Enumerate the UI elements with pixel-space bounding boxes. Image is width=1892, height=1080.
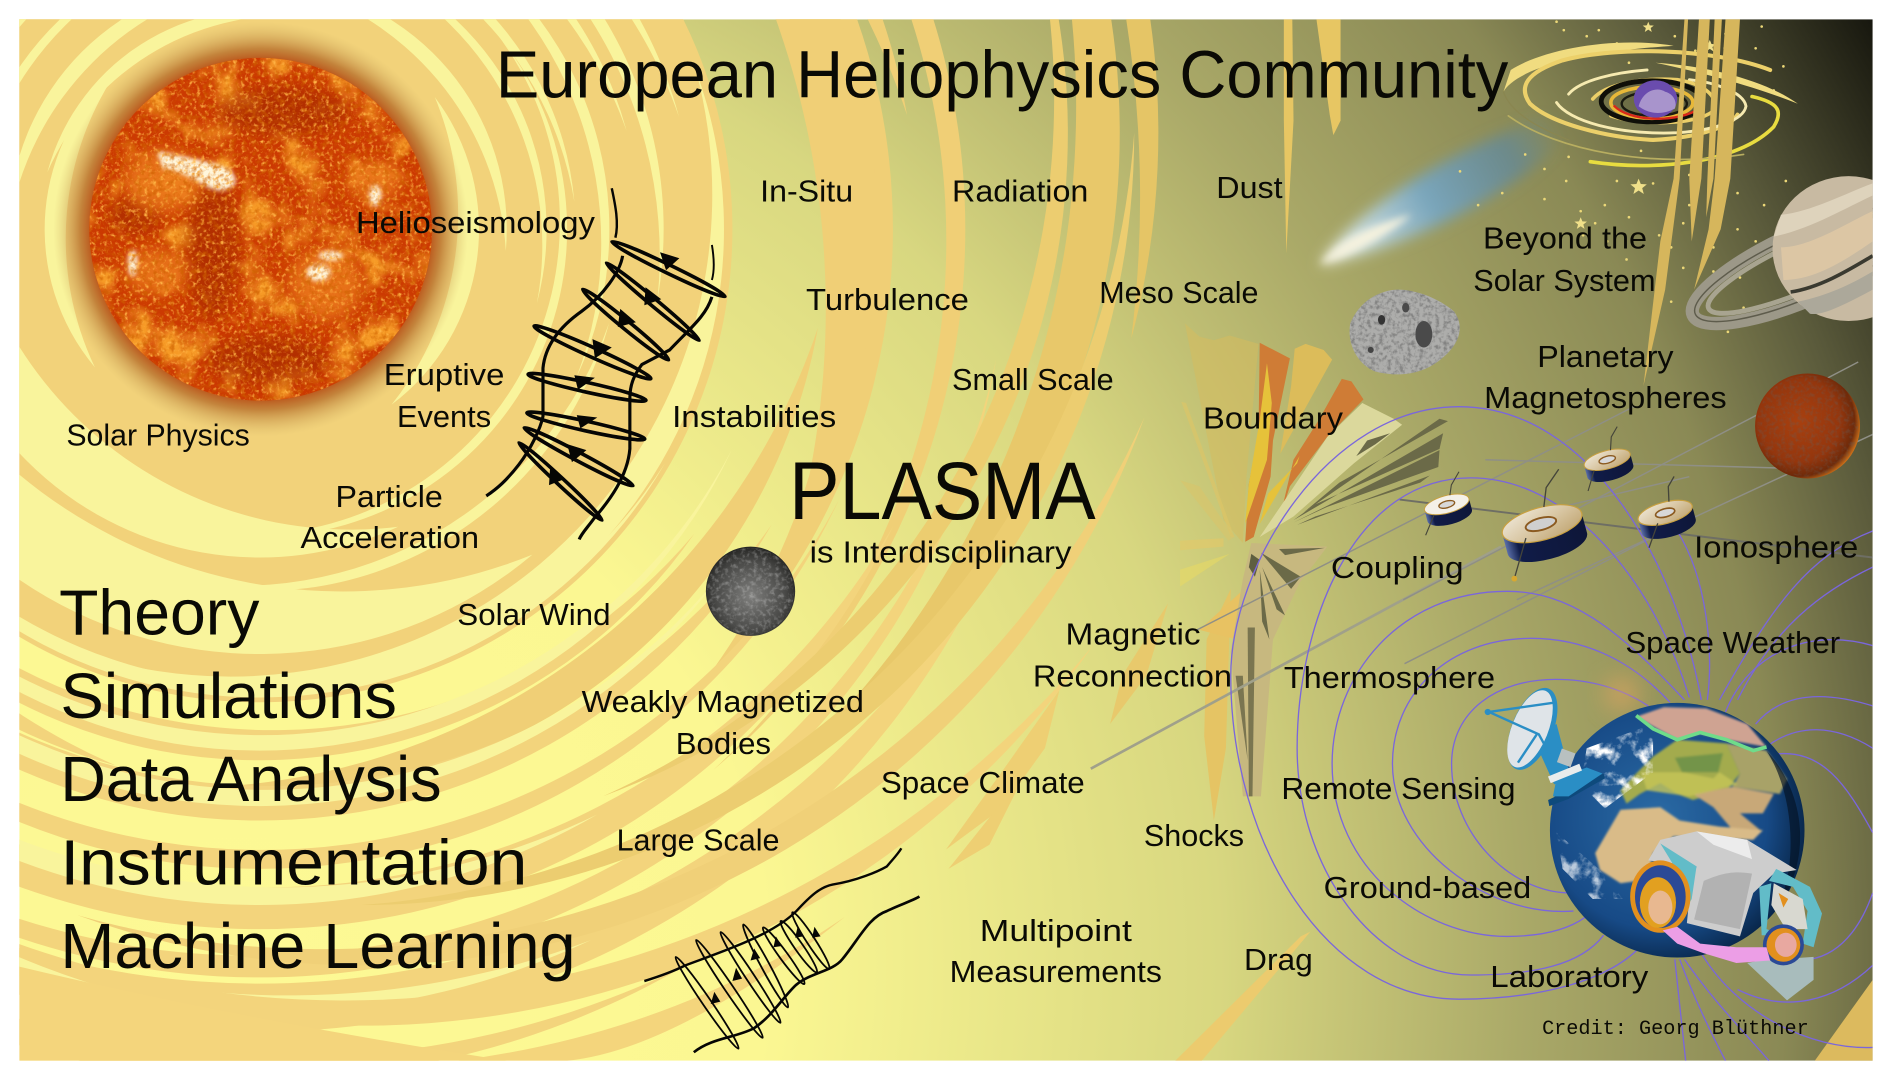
icon: Saturn — [1679, 176, 1892, 346]
label: Planetary Magnetospheres: Planetary — [1537, 339, 1674, 374]
label: Eruptive Events — [384, 357, 504, 434]
label: Solar Wind: Solar Wind — [457, 597, 611, 632]
label: Ionosphere: Ionosphere — [1694, 529, 1858, 564]
list: methods: Machine Learning — [60, 910, 576, 982]
label: Particle Acceleration: Acceleration — [300, 520, 479, 555]
purple magnetic field lines — [1231, 407, 1873, 1061]
label: Dust: Dust — [1216, 170, 1283, 205]
list: methods: Simulations — [60, 660, 397, 732]
label: Remote Sensing: Remote Sensing — [1281, 771, 1516, 806]
list: methods: Data Analysis — [60, 743, 442, 815]
swirling solar wind arcs — [19, 19, 996, 1061]
label: Magnetic Reconnection: Reconnection — [1033, 659, 1232, 694]
icon: sun halo — [53, 22, 468, 437]
label: Solar Physics: Solar Physics — [66, 417, 250, 452]
label: Boundary: Boundary — [1203, 400, 1344, 435]
bottom-left orange corner — [19, 967, 507, 1061]
gray field lines — [1091, 362, 1873, 769]
label: Radiation: Radiation — [952, 174, 1088, 209]
label: Magnetic Reconnection: Magnetic — [1065, 616, 1201, 651]
label: Large Scale: Large Scale — [617, 823, 779, 858]
label: Laboratory: Laboratory — [1490, 959, 1649, 994]
icon: Mars — [1755, 373, 1860, 478]
label: Helioseismology: Helioseismology — [356, 205, 596, 240]
label: Weakly Magnetized Bodies — [582, 684, 864, 761]
icon: sun — [89, 58, 432, 401]
label: Coupling: Coupling — [1331, 550, 1464, 585]
label: Drag: Drag — [1244, 942, 1313, 977]
heading: PLASMA: PLASMA — [789, 446, 1096, 537]
label: Thermosphere: Thermosphere — [1284, 660, 1495, 695]
label: Small Scale: Small Scale — [952, 362, 1114, 397]
icon: radio dish — [1485, 681, 1605, 806]
label: Beyond the Solar System: Solar System — [1473, 263, 1656, 298]
icon: spiral galaxy — [1503, 42, 1798, 166]
lower flux rope — [644, 848, 919, 1052]
label: Meso Scale: Meso Scale — [1099, 275, 1259, 310]
outer orange bands — [19, 19, 1158, 1026]
label: Eruptive Events: Events — [397, 399, 491, 434]
label: Shocks: Shocks — [1144, 818, 1244, 853]
label: Space Weather: Space Weather — [1625, 625, 1840, 660]
icon: asteroid — [1350, 290, 1460, 374]
title: European Heliophysics Community — [496, 39, 1509, 113]
label: Multipoint Measurements: Multipoint — [980, 913, 1132, 948]
subheading: is Interdisciplinary — [810, 534, 1072, 569]
label: Particle Acceleration: Particle — [335, 479, 443, 514]
icon: tokamak laboratory device — [1630, 831, 1822, 1000]
credit: Credit: Georg Blüthner — [1542, 1018, 1809, 1041]
label: Turbulence: Turbulence — [806, 282, 969, 317]
upper flux rope — [486, 188, 727, 539]
label: Multipoint Measurements — [950, 913, 1162, 989]
icon: stars — [1460, 22, 1786, 332]
label: Weakly Magnetized Bodies: Bodies — [676, 726, 771, 761]
label: In-Situ: In-Situ — [760, 174, 853, 209]
label: Planetary Magnetospheres — [1484, 339, 1727, 415]
label: Planetary Magnetospheres: Magnetospheres — [1484, 380, 1727, 415]
fan boundary structure — [1180, 323, 1448, 796]
list: methods: Instrumentation — [60, 827, 527, 899]
list: methods — [59, 577, 576, 982]
icon: Mercury — [706, 547, 795, 636]
label: Instabilities: Instabilities — [672, 399, 836, 434]
icon: satellites — [1412, 425, 1700, 582]
label: Ground-based: Ground-based — [1324, 870, 1531, 905]
icon: large stars — [1574, 22, 1735, 229]
tapered streaks — [946, 19, 1873, 1061]
tan vertical streaks over galaxy — [1643, 19, 1740, 386]
yellow streaks — [19, 19, 730, 1000]
label: Multipoint Measurements: Measurements — [950, 954, 1162, 989]
label: Beyond the Solar System: Beyond the — [1483, 221, 1647, 256]
label: Particle Acceleration — [300, 479, 479, 555]
label: Weakly Magnetized Bodies: Weakly Magnetized — [582, 684, 864, 719]
lower orange sweep — [459, 917, 845, 1061]
label: Beyond the Solar System — [1473, 221, 1656, 298]
icon: comet — [1320, 115, 1557, 265]
icon: Earth — [1550, 677, 1805, 958]
label: Eruptive Events: Eruptive — [384, 357, 504, 392]
label: Space Climate: Space Climate — [881, 765, 1085, 800]
label: Magnetic Reconnection — [1033, 616, 1232, 694]
list: methods: Theory — [59, 577, 259, 649]
